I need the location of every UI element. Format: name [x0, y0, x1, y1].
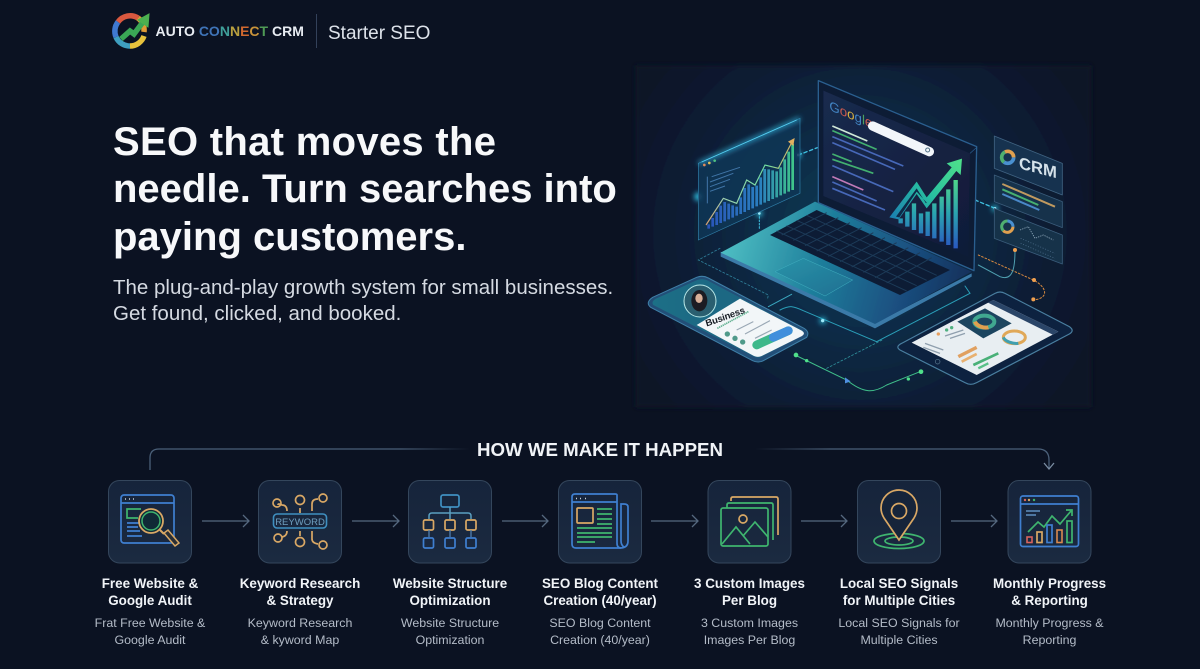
headline	[113, 120, 617, 259]
icon: keyword network: REYWORD	[275, 517, 325, 528]
step 2: keyword research	[240, 480, 360, 647]
tablet screen	[912, 300, 1058, 375]
icon: logo ring with growth arrow	[115, 14, 149, 46]
icon: stacked images	[721, 497, 778, 546]
metrics list panel	[994, 175, 1062, 228]
icon: analytics dashboard	[1020, 496, 1078, 546]
tablet donut tile	[957, 308, 1012, 338]
right floating CRM panels	[994, 136, 1062, 264]
laptop screen bezel	[818, 81, 977, 271]
laptop screen bar chart	[901, 180, 956, 248]
step 2 title	[240, 576, 360, 608]
step 5 description: Images Per Blog	[704, 633, 795, 647]
step 4 description: Creation (40/year)	[550, 633, 650, 647]
step 5 description	[701, 616, 798, 647]
step 1 title	[102, 576, 199, 608]
step 6 description	[838, 616, 960, 647]
connector lines	[698, 147, 1045, 391]
keyboard	[770, 210, 950, 295]
logo and product name header	[115, 14, 430, 48]
step 2 description: & kyword Map	[261, 633, 339, 647]
step 1 description: Google Audit	[115, 633, 186, 647]
step 6 title	[840, 576, 958, 608]
step 3 title: Optimization	[409, 593, 491, 608]
search bar	[873, 126, 929, 152]
subheadline: Get found, clicked, and booked.	[113, 302, 401, 325]
step 6 title: Local SEO Signals	[840, 576, 958, 591]
arrow	[502, 515, 548, 527]
step 7: reporting	[993, 480, 1106, 647]
hero illustration: connected devices	[635, 65, 1091, 407]
step 7 title: Monthly Progress	[993, 576, 1106, 591]
headline: SEO that moves the	[113, 120, 496, 164]
tablet list	[923, 326, 965, 353]
step 1 title: Google Audit	[108, 593, 192, 608]
step 4 description: SEO Blog Content	[549, 616, 651, 630]
step 7 description	[995, 616, 1104, 647]
google wordmark: Google	[829, 98, 873, 131]
profile card	[697, 299, 804, 357]
step 2 title: & Strategy	[267, 593, 334, 608]
CRM panel: CRM	[1019, 154, 1057, 182]
logo wordmark: AUTO CONNECT CRM	[156, 23, 304, 39]
step 4: blog content	[542, 480, 659, 647]
tablet ring chart	[1003, 331, 1025, 344]
laptop screen display	[823, 91, 970, 257]
icon: sitemap	[424, 495, 476, 548]
left floating chart panel	[698, 118, 800, 240]
product name: Starter SEO	[328, 23, 430, 44]
step 4 title: SEO Blog Content	[542, 576, 659, 591]
step 3 description: Optimization	[416, 633, 485, 647]
step 7 description: Monthly Progress &	[995, 616, 1104, 630]
step 2 description	[248, 616, 352, 647]
icon: keyword network	[273, 494, 327, 549]
step 3 description: Website Structure	[401, 616, 499, 630]
step 7 description: Reporting	[1023, 633, 1076, 647]
donut and scatter panel	[994, 208, 1062, 264]
arrow	[951, 515, 997, 527]
list lines	[737, 321, 772, 338]
icon: map pin	[874, 490, 924, 548]
step 2 title: Keyword Research	[240, 576, 360, 591]
business text: Business	[704, 305, 746, 330]
step 6: local seo	[838, 480, 960, 647]
step 1: website audit	[95, 480, 206, 647]
step 6 title: for Multiple Cities	[843, 593, 955, 608]
laptop	[721, 81, 977, 328]
step 1 title: Free Website &	[102, 576, 199, 591]
step 4 description	[549, 616, 651, 647]
step 4 title	[542, 576, 659, 608]
bracket arrow across the steps	[150, 449, 1054, 470]
step 3 title: Website Structure	[393, 576, 507, 591]
step 5 description: 3 Custom Images	[701, 616, 798, 630]
arrow	[202, 515, 249, 527]
tablet bar chart	[958, 347, 977, 357]
section heading: HOW WE MAKE IT HAPPEN	[477, 439, 723, 460]
step 1 description	[95, 616, 206, 647]
step 5 title: 3 Custom Images	[694, 576, 805, 591]
arrow	[352, 515, 399, 527]
subheadline	[113, 276, 613, 325]
step 5 title	[694, 576, 805, 608]
step 2 description: Keyword Research	[248, 616, 352, 630]
trackpad	[775, 258, 853, 296]
tablet dashboard	[898, 292, 1072, 384]
step 1 description: Frat Free Website &	[95, 616, 206, 630]
step 6 description: Multiple Cities	[860, 633, 938, 647]
arrow	[801, 515, 847, 527]
subheadline: The plug-and-play growth system for small businesses.	[113, 276, 613, 299]
headline: needle. Turn searches into	[113, 167, 617, 211]
step 3: website structure	[393, 480, 507, 647]
arrow	[651, 515, 698, 527]
avatar	[684, 285, 716, 317]
smartphone with business profile	[648, 276, 808, 362]
icon: newspaper	[572, 494, 628, 548]
step 7 title: & Reporting	[1011, 593, 1088, 608]
step 4 title: Creation (40/year)	[543, 593, 657, 608]
step 7 title	[993, 576, 1106, 608]
icon: browser with magnifier	[121, 495, 179, 546]
growth arrow	[889, 159, 962, 219]
step 6 description: Local SEO Signals for	[838, 616, 960, 630]
call to action button	[757, 331, 788, 345]
step 5: custom images	[694, 480, 805, 647]
glowing connector nodes	[694, 152, 1036, 383]
laptop base	[721, 252, 972, 328]
headline: paying customers.	[113, 215, 466, 259]
step 5 title: Per Blog	[722, 593, 777, 608]
step 3 description	[401, 616, 499, 647]
step 3 title	[393, 576, 507, 608]
search result lines	[832, 126, 903, 210]
